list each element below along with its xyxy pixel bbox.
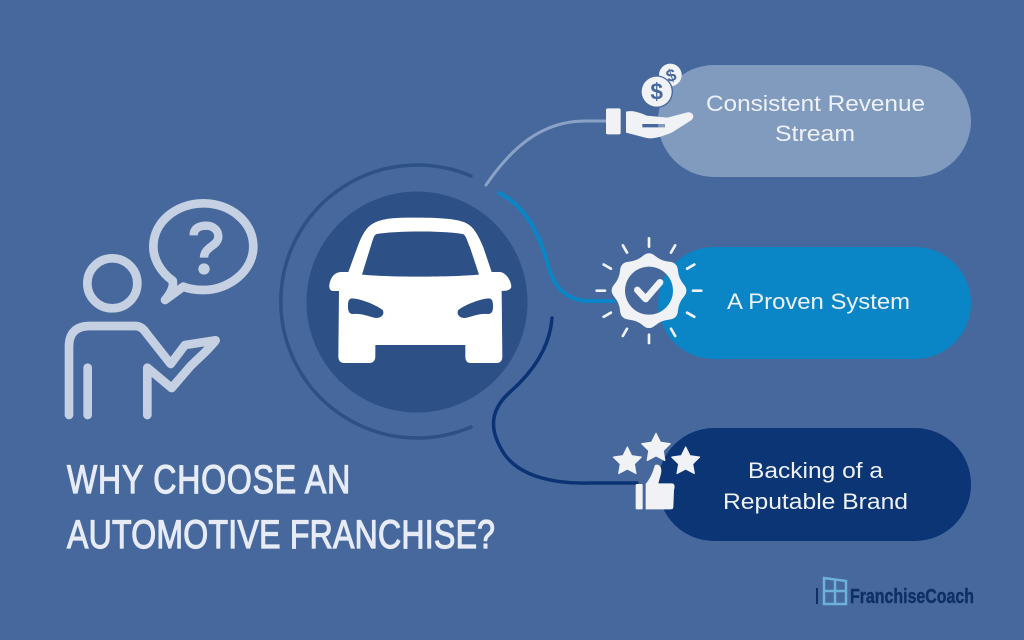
icon: hand with coins: $ xyxy=(663,64,679,86)
connector: car to reputable brand xyxy=(494,318,637,483)
icon: hand with coins: $ xyxy=(650,79,663,105)
panel: consistent revenue stream pill: Stream xyxy=(775,121,855,146)
title xyxy=(67,457,495,557)
panel: a proven system pill: A Proven System xyxy=(727,289,910,314)
icon: person with question bubble xyxy=(69,203,253,415)
connector: car to revenue xyxy=(486,121,612,185)
inner circle behind car xyxy=(306,192,528,412)
panel: consistent revenue stream pill xyxy=(658,65,971,177)
panel: backing of a reputable brand pill: Reputable Brand xyxy=(723,489,908,514)
icon: car front xyxy=(329,218,511,363)
logo: FranchiseCoach: FranchiseCoach xyxy=(850,586,974,608)
connector: car to proven system xyxy=(499,193,614,301)
icon: three stars and thumbs up xyxy=(613,433,700,509)
panel: backing of a reputable brand pill xyxy=(658,428,971,541)
icon: badge with check mark xyxy=(597,238,701,343)
title: WHY CHOOSE AN xyxy=(67,457,350,502)
panel: a proven system pill xyxy=(658,247,971,359)
panel: backing of a reputable brand pill: Backing of a xyxy=(748,458,884,483)
title: AUTOMOTIVE FRANCHISE? xyxy=(67,512,495,557)
icon: hand with coins xyxy=(606,64,693,138)
logo: FranchiseCoach xyxy=(816,578,974,608)
panel: consistent revenue stream pill: Consistent Revenue xyxy=(706,91,925,116)
outer ring arc around car xyxy=(281,165,471,438)
